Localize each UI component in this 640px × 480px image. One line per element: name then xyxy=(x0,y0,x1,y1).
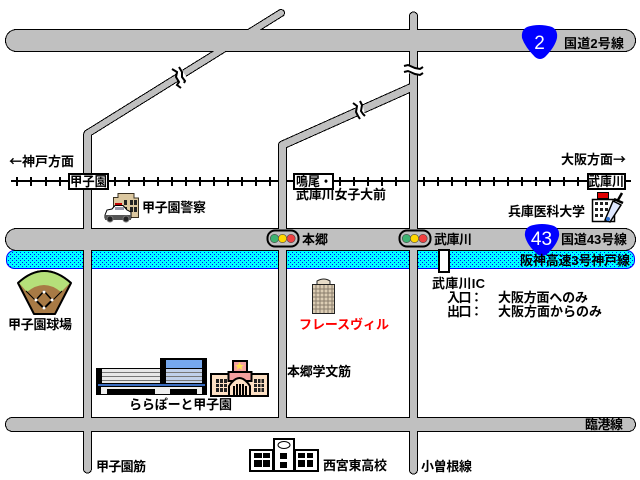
interchange notes: 大阪方面へのみ xyxy=(498,290,588,305)
label: to Osaka: 大阪方面→ xyxy=(561,149,626,168)
interchange ramp xyxy=(439,250,449,272)
label: LaLaport Koshien: ららぽーと甲子園 xyxy=(129,397,232,412)
road break mark: Naruo diagonal xyxy=(353,101,365,119)
label: national route 43: 国道43号線 xyxy=(561,232,627,247)
icon: LaLaport shopping mall xyxy=(96,358,207,395)
interchange notes: 入口： xyxy=(447,290,483,305)
label: Placeville: フレースヴィル xyxy=(299,317,389,332)
icon: Koshien stadium xyxy=(18,271,71,314)
expressway: Hanshin Route 3 xyxy=(6,250,634,268)
label: Ogone line: 小曽根線 xyxy=(421,459,472,474)
railway line xyxy=(11,177,631,186)
label: Hyogo College of Medicine: 兵庫医科大学 xyxy=(508,204,585,219)
label: Hongo Gakubun street: 本郷学文筋 xyxy=(287,364,351,379)
label: Koshien street: 甲子園筋 xyxy=(96,459,146,474)
station: Mukogawa: 武庫川 xyxy=(588,174,624,189)
icon: hospital and syringe xyxy=(592,192,623,222)
icon: station-style building xyxy=(211,361,268,396)
road break mark: Ogone line xyxy=(404,65,423,75)
station: Koshien: 甲子園 xyxy=(70,174,107,189)
label: Mukogawa Women's University station: 武庫川女子大前 xyxy=(296,187,386,202)
label: Koshien stadium: 甲子園球場 xyxy=(8,317,72,332)
traffic signal: Hongo xyxy=(268,230,298,246)
label: national route 2: 国道2号線 xyxy=(564,36,624,51)
label: Koshien police: 甲子園警察 xyxy=(142,200,206,215)
road break mark: Koshien diagonal xyxy=(172,67,190,89)
label: Hongo: 本郷 xyxy=(302,232,328,247)
interchange notes xyxy=(432,276,602,319)
icon: police station and patrol car xyxy=(105,194,138,222)
route shield: national route 2 xyxy=(522,25,557,59)
route shield: national route 2: 2 xyxy=(534,33,545,54)
icon: tower apartment xyxy=(312,279,334,314)
label: Hanshin Expressway route 3: 阪神高速3号神戸線 xyxy=(520,253,630,268)
label: Mukogawa: 武庫川 xyxy=(434,232,472,247)
interchange notes: 大阪方面からのみ xyxy=(498,304,602,319)
station: Naruo: 鳴尾・ xyxy=(296,174,332,189)
route shield: national route 43 xyxy=(525,224,559,256)
label: Rinko line: 臨港線 xyxy=(585,417,623,432)
label: to Kobe: ←神戸方面 xyxy=(9,151,74,170)
interchange notes: 出口： xyxy=(447,304,483,319)
icon: school xyxy=(250,439,318,471)
interchange notes: 武庫川IC xyxy=(432,276,486,291)
label: Nishinomiya Higashi high school: 西宮東高校 xyxy=(323,458,387,473)
route shield: national route 43: 43 xyxy=(531,229,552,250)
traffic signal: Mukogawa xyxy=(400,230,430,246)
